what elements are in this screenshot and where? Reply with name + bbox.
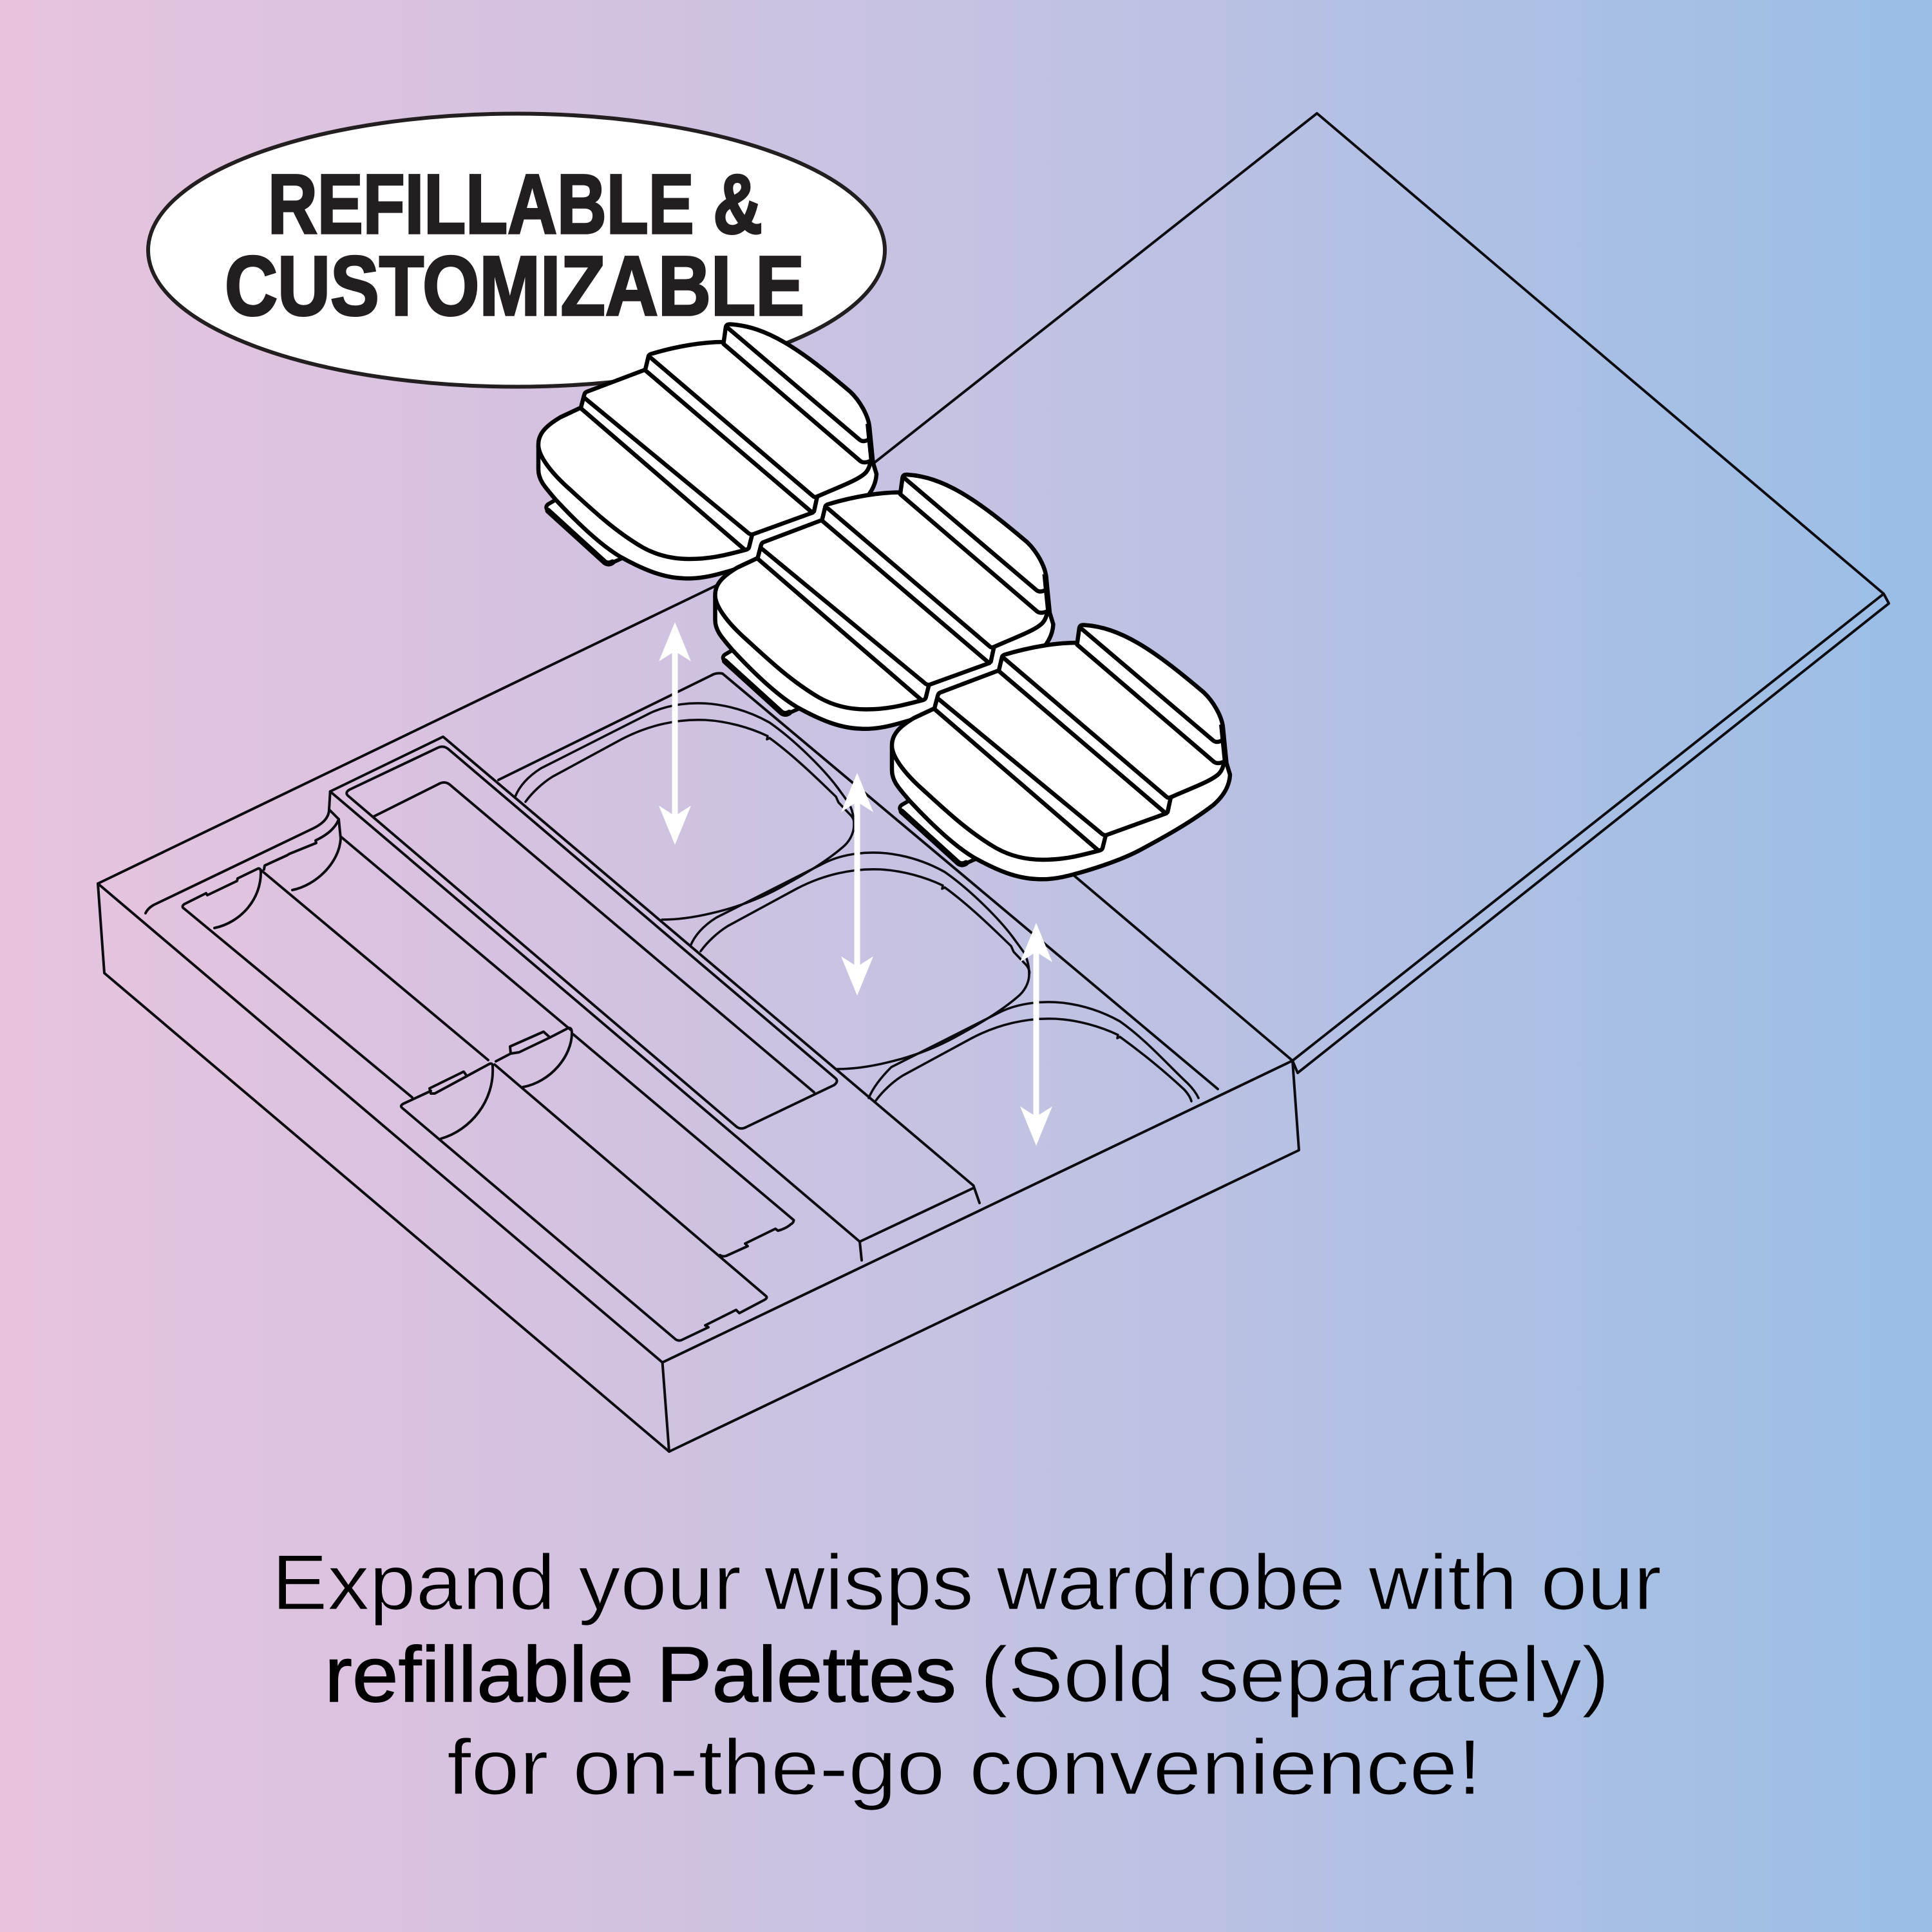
caption text bbox=[272, 1539, 1662, 1811]
centre divider with long pan pocket bbox=[330, 746, 973, 1260]
well zone top edges bbox=[498, 673, 1218, 1089]
caption text: Expand your wisps wardrobe with our bbox=[272, 1539, 1662, 1626]
callout heading: REFILLABLE & bbox=[268, 156, 762, 251]
lid of the case bbox=[837, 113, 1889, 1073]
caption text: refillable Palettes bbox=[325, 1631, 956, 1718]
palette well 1 bbox=[515, 703, 854, 920]
callout: refillable and customizable bbox=[148, 113, 885, 386]
refill palette 3 bbox=[892, 625, 1230, 879]
left long pans with half-moon notches bbox=[183, 810, 794, 1341]
caption text: (Sold separately) bbox=[980, 1631, 1609, 1718]
arrow: lift palette 2 bbox=[841, 773, 873, 996]
callout heading: CUSTOMIZABLE bbox=[225, 238, 804, 333]
callout ellipse bbox=[148, 113, 885, 386]
arrow: lift palette 1 bbox=[659, 622, 691, 845]
open case tray bbox=[98, 574, 1299, 1452]
callout heading bbox=[225, 156, 804, 333]
palette well 2 bbox=[690, 853, 1029, 1069]
refill palette 2 bbox=[715, 475, 1054, 729]
palette well 3 bbox=[869, 1002, 1198, 1101]
caption text: for on-the-go convenience! bbox=[447, 1723, 1482, 1811]
case outer edges bbox=[98, 574, 1299, 1452]
refill palette 1 bbox=[538, 324, 876, 578]
left channel rim bbox=[146, 737, 980, 1203]
arrow: lift palette 3 bbox=[1020, 923, 1052, 1146]
